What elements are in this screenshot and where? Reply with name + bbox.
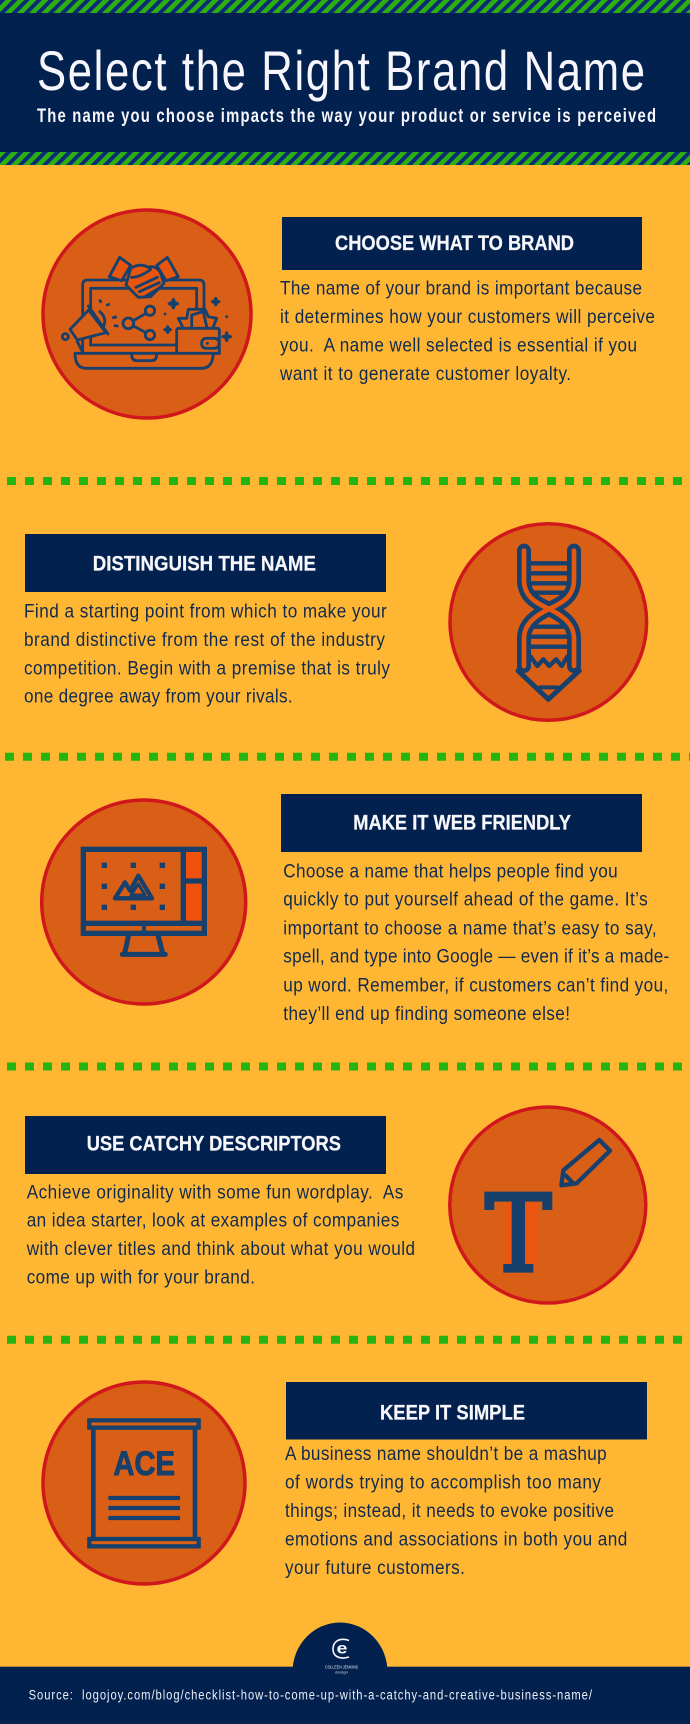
icon: DNA helix pencil [450, 524, 647, 720]
icon: ACE poster [43, 1382, 245, 1584]
panel: keep it simple [43, 1382, 647, 1584]
body text: with clever titles and think about what you would [26, 1237, 415, 1259]
body text [26, 1180, 415, 1288]
heading bar: MAKE IT WEB FRIENDLY [353, 810, 571, 834]
header banner [0, 0, 690, 165]
body text: emotions and associations in both you and [285, 1527, 627, 1550]
body text: your future customers. [285, 1556, 465, 1578]
body text: come up with for your brand. [27, 1265, 255, 1288]
body text [24, 599, 391, 707]
icon: ACE poster: ACE [113, 1445, 175, 1483]
bottom stripe band [0, 152, 690, 165]
footer [0, 1622, 690, 1724]
body text: up word. Remember, if customers can’t find you, [283, 973, 668, 996]
panel: use catchy descriptors [25, 1107, 646, 1303]
heading bar: KEEP IT SIMPLE [380, 1400, 525, 1424]
body text: spell, and type into Google — even if it’s a made- [283, 945, 669, 967]
body text: The name of your brand is important because [280, 276, 642, 299]
heading bar: USE CATCHY DESCRIPTORS [87, 1132, 341, 1156]
body text: they’ll end up finding someone else! [283, 1002, 570, 1024]
icon: laptop with handshake, megaphone and wallet [43, 210, 251, 418]
body text: an idea starter, look at examples of companies [27, 1209, 399, 1231]
body text: Find a starting point from which to make your [24, 599, 387, 622]
body text: things; instead, it needs to evoke positive [285, 1499, 614, 1521]
body text: competition. Begin with a premise that is truly [24, 656, 391, 679]
body text [283, 859, 669, 1024]
heading bar [25, 1116, 386, 1174]
heading bar [281, 794, 642, 852]
body text: brand distinctive from the rest of the industry [24, 628, 386, 650]
body text: Choose a name that helps people find you [283, 859, 618, 882]
heading bar [25, 534, 386, 592]
logo badge [292, 1622, 388, 1722]
panel: choose what to brand [43, 210, 655, 418]
logo badge: design [335, 1670, 348, 1674]
source line: Source: logojoy.com/blog/checklist-how-to-come-up-with-a-catchy-and-creative-business-name/ [29, 1687, 592, 1703]
body text: A business name shouldn’t be a mashup [285, 1442, 607, 1464]
heading bar [286, 1382, 647, 1440]
body text [285, 1442, 627, 1578]
icon: letter T with pencil [450, 1107, 646, 1303]
heading bar: DISTINGUISH THE NAME [93, 551, 316, 575]
top stripe band [0, 0, 690, 13]
body text: you. A name well selected is essential if you [280, 334, 637, 356]
heading bar [282, 217, 642, 270]
title: Select the Right Brand Name [37, 40, 645, 102]
panel: make it web friendly [42, 794, 669, 1024]
body text: of words trying to accomplish too many [285, 1471, 602, 1493]
body text: quickly to put yourself ahead of the game. It’s [283, 888, 648, 910]
body text: it determines how your customers will perceive [280, 305, 655, 327]
heading bar: CHOOSE WHAT TO BRAND [335, 231, 574, 255]
body text [279, 276, 655, 384]
body text: one degree away from your rivals. [24, 684, 293, 707]
body text: want it to generate customer loyalty. [279, 362, 571, 384]
icon: monitor with image [42, 800, 246, 1004]
body text: important to choose a name that’s easy to say, [283, 916, 657, 939]
subtitle: The name you choose impacts the way your product or service is perceived [37, 105, 656, 126]
panel: distinguish the name [24, 524, 647, 720]
body text: Achieve originality with some fun wordplay. As [27, 1180, 403, 1203]
logo badge: e [336, 1640, 348, 1658]
logo badge: COLLEEN JENKINS [325, 1664, 358, 1670]
